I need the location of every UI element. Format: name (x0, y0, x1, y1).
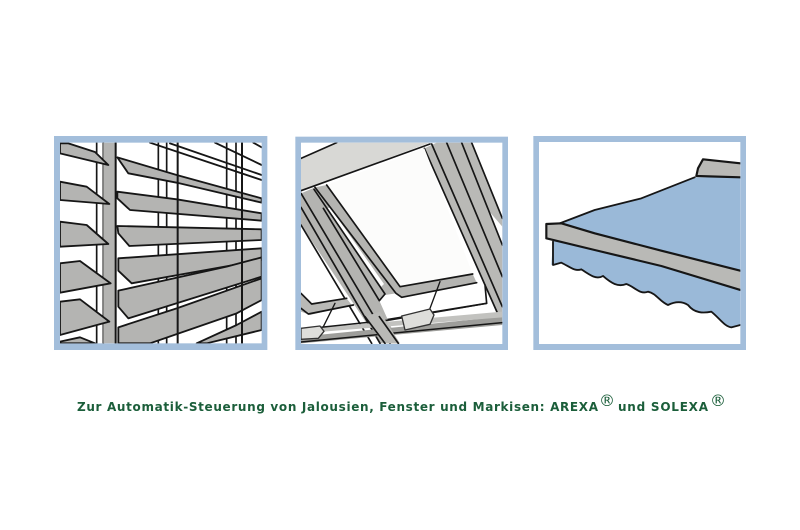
central grey post (103, 143, 116, 343)
front rail (546, 223, 740, 290)
caption: Zur Automatik-Steuerung von Jalousien, Fenster und Markisen: AREXA (77, 400, 599, 414)
panel: roof window (295, 137, 508, 350)
glass pane (424, 148, 432, 168)
lower opening (484, 285, 485, 286)
panel: awning (533, 136, 746, 350)
left slats (60, 143, 111, 343)
right slats (117, 143, 262, 343)
lower-left sash (301, 293, 352, 315)
bottom rail (301, 317, 502, 343)
caption: ® (599, 391, 615, 410)
front cords (116, 143, 242, 343)
right frame bars (424, 143, 502, 317)
caption (77, 391, 726, 414)
top blind box (301, 143, 430, 191)
caption: und SOLEXA (618, 400, 709, 414)
lower crossing bars (370, 314, 400, 344)
vertical cords (97, 143, 236, 343)
motor arms (323, 282, 440, 327)
left motor (301, 326, 324, 339)
right motor (402, 309, 434, 330)
roller box (698, 160, 740, 177)
panel: venetian blinds (54, 136, 267, 350)
left bars and sash (301, 185, 477, 343)
awning cloth (551, 177, 740, 327)
caption: ® (710, 391, 726, 410)
